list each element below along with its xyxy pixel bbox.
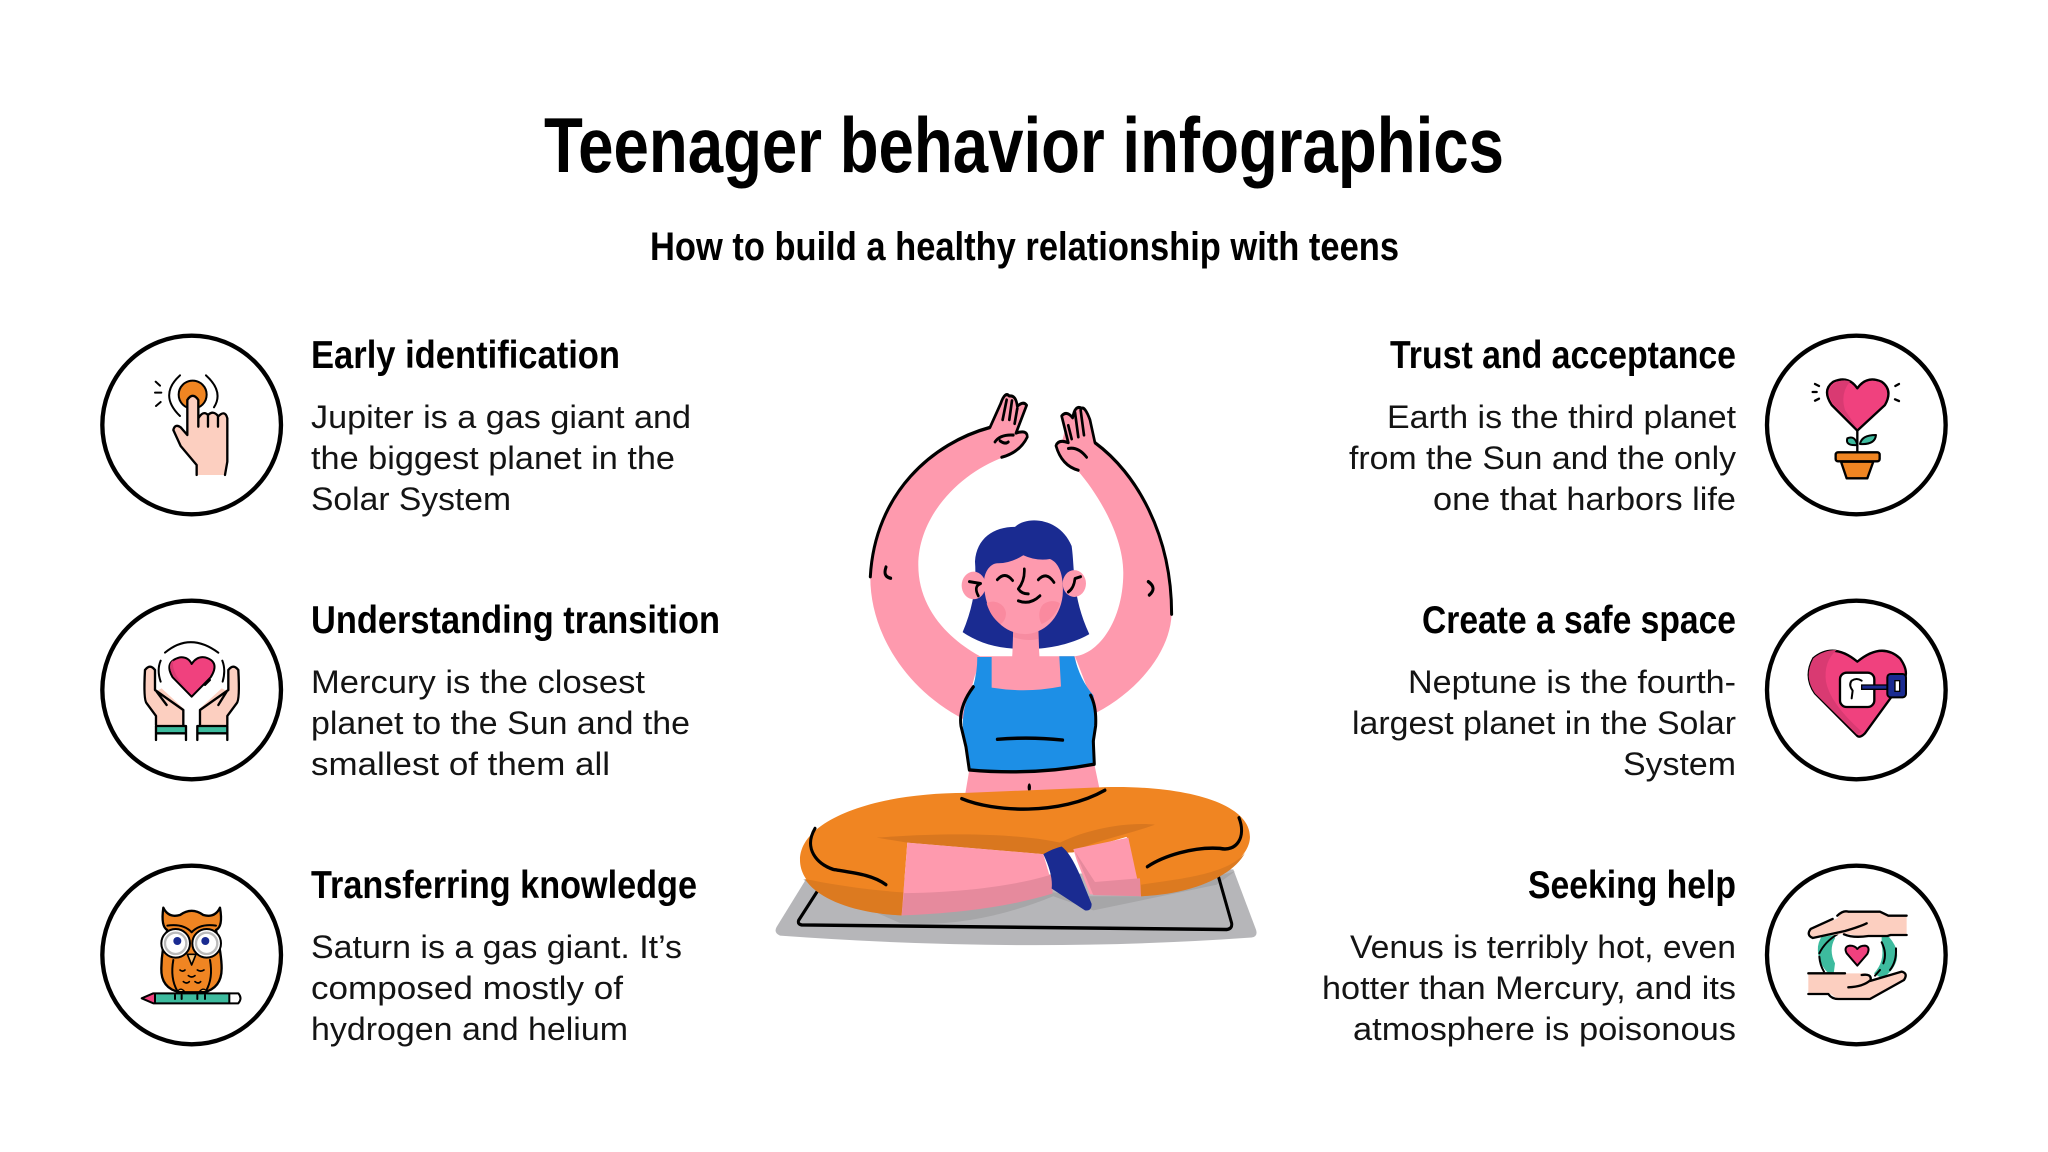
icon: hands holding heart bbox=[102, 601, 281, 779]
title: Teenager behavior infographics bbox=[544, 101, 1504, 189]
text block: transferring knowledge: composed mostly of bbox=[311, 970, 623, 1006]
arms bbox=[870, 412, 1172, 719]
text block: create a safe space: largest planet in the Solar bbox=[1352, 705, 1736, 741]
text block: seeking help bbox=[1322, 929, 1736, 1047]
panel: transferring knowledge bbox=[102, 864, 697, 1047]
panel: early identification bbox=[102, 334, 691, 517]
illustration: woman meditating bbox=[776, 395, 1257, 945]
icon: finger tapping bbox=[102, 336, 281, 514]
heading: understanding transition: Understanding transition bbox=[311, 599, 720, 642]
panel: trust and acceptance bbox=[1349, 334, 1946, 517]
text block: understanding transition bbox=[311, 664, 690, 782]
text block: early identification: the biggest planet in the bbox=[311, 440, 675, 476]
hair bbox=[963, 520, 1089, 649]
text block: create a safe space: Neptune is the fourth- bbox=[1408, 664, 1736, 700]
text block: create a safe space: System bbox=[1623, 746, 1736, 782]
text block: early identification: Jupiter is a gas giant and bbox=[311, 399, 691, 435]
text block: understanding transition: planet to the Sun and the bbox=[311, 705, 690, 741]
subtitle: How to build a healthy relationship with teens bbox=[650, 225, 1399, 269]
text block: early identification: Solar System bbox=[311, 481, 511, 517]
text block: trust and acceptance: one that harbors life bbox=[1433, 481, 1736, 517]
neck bbox=[1012, 627, 1039, 656]
text block: transferring knowledge: hydrogen and helium bbox=[311, 1011, 628, 1047]
panel: create a safe space bbox=[1352, 599, 1946, 782]
heading: transferring knowledge: Transferring knowledge bbox=[311, 864, 697, 907]
text block: transferring knowledge bbox=[311, 929, 682, 1047]
text block: transferring knowledge: Saturn is a gas giant. It’s bbox=[311, 929, 682, 965]
torso bbox=[961, 634, 1100, 796]
panel: seeking help bbox=[1322, 864, 1946, 1047]
text block: seeking help: Venus is terribly hot, even bbox=[1350, 929, 1736, 965]
yoga mat bbox=[776, 869, 1257, 945]
icon: heart with key bbox=[1767, 601, 1946, 779]
text block: trust and acceptance: Earth is the third planet bbox=[1387, 399, 1736, 435]
crossed legs in orange pants bbox=[800, 787, 1250, 915]
icon: hands protecting heart bbox=[1767, 866, 1946, 1044]
text block: create a safe space bbox=[1352, 664, 1736, 782]
left hand bbox=[990, 395, 1027, 457]
heading: trust and acceptance: Trust and acceptance bbox=[1390, 334, 1736, 377]
right hand bbox=[1056, 407, 1095, 470]
text block: understanding transition: Mercury is the closest bbox=[311, 664, 645, 700]
heading: early identification: Early identification bbox=[311, 334, 620, 377]
text block: understanding transition: smallest of them all bbox=[311, 746, 610, 782]
icon: owl on pencil bbox=[102, 866, 281, 1044]
text block: seeking help: atmosphere is poisonous bbox=[1353, 1011, 1736, 1047]
text block: seeking help: hotter than Mercury, and its bbox=[1322, 970, 1736, 1006]
icon: heart plant in pot bbox=[1767, 336, 1946, 514]
face bbox=[962, 555, 1086, 634]
text block: early identification bbox=[311, 399, 691, 517]
heading: seeking help: Seeking help bbox=[1528, 864, 1736, 907]
text block: trust and acceptance: from the Sun and the only bbox=[1349, 440, 1736, 476]
panel: understanding transition bbox=[102, 599, 720, 782]
text block: trust and acceptance bbox=[1349, 399, 1736, 517]
heading: create a safe space: Create a safe space bbox=[1422, 599, 1736, 642]
